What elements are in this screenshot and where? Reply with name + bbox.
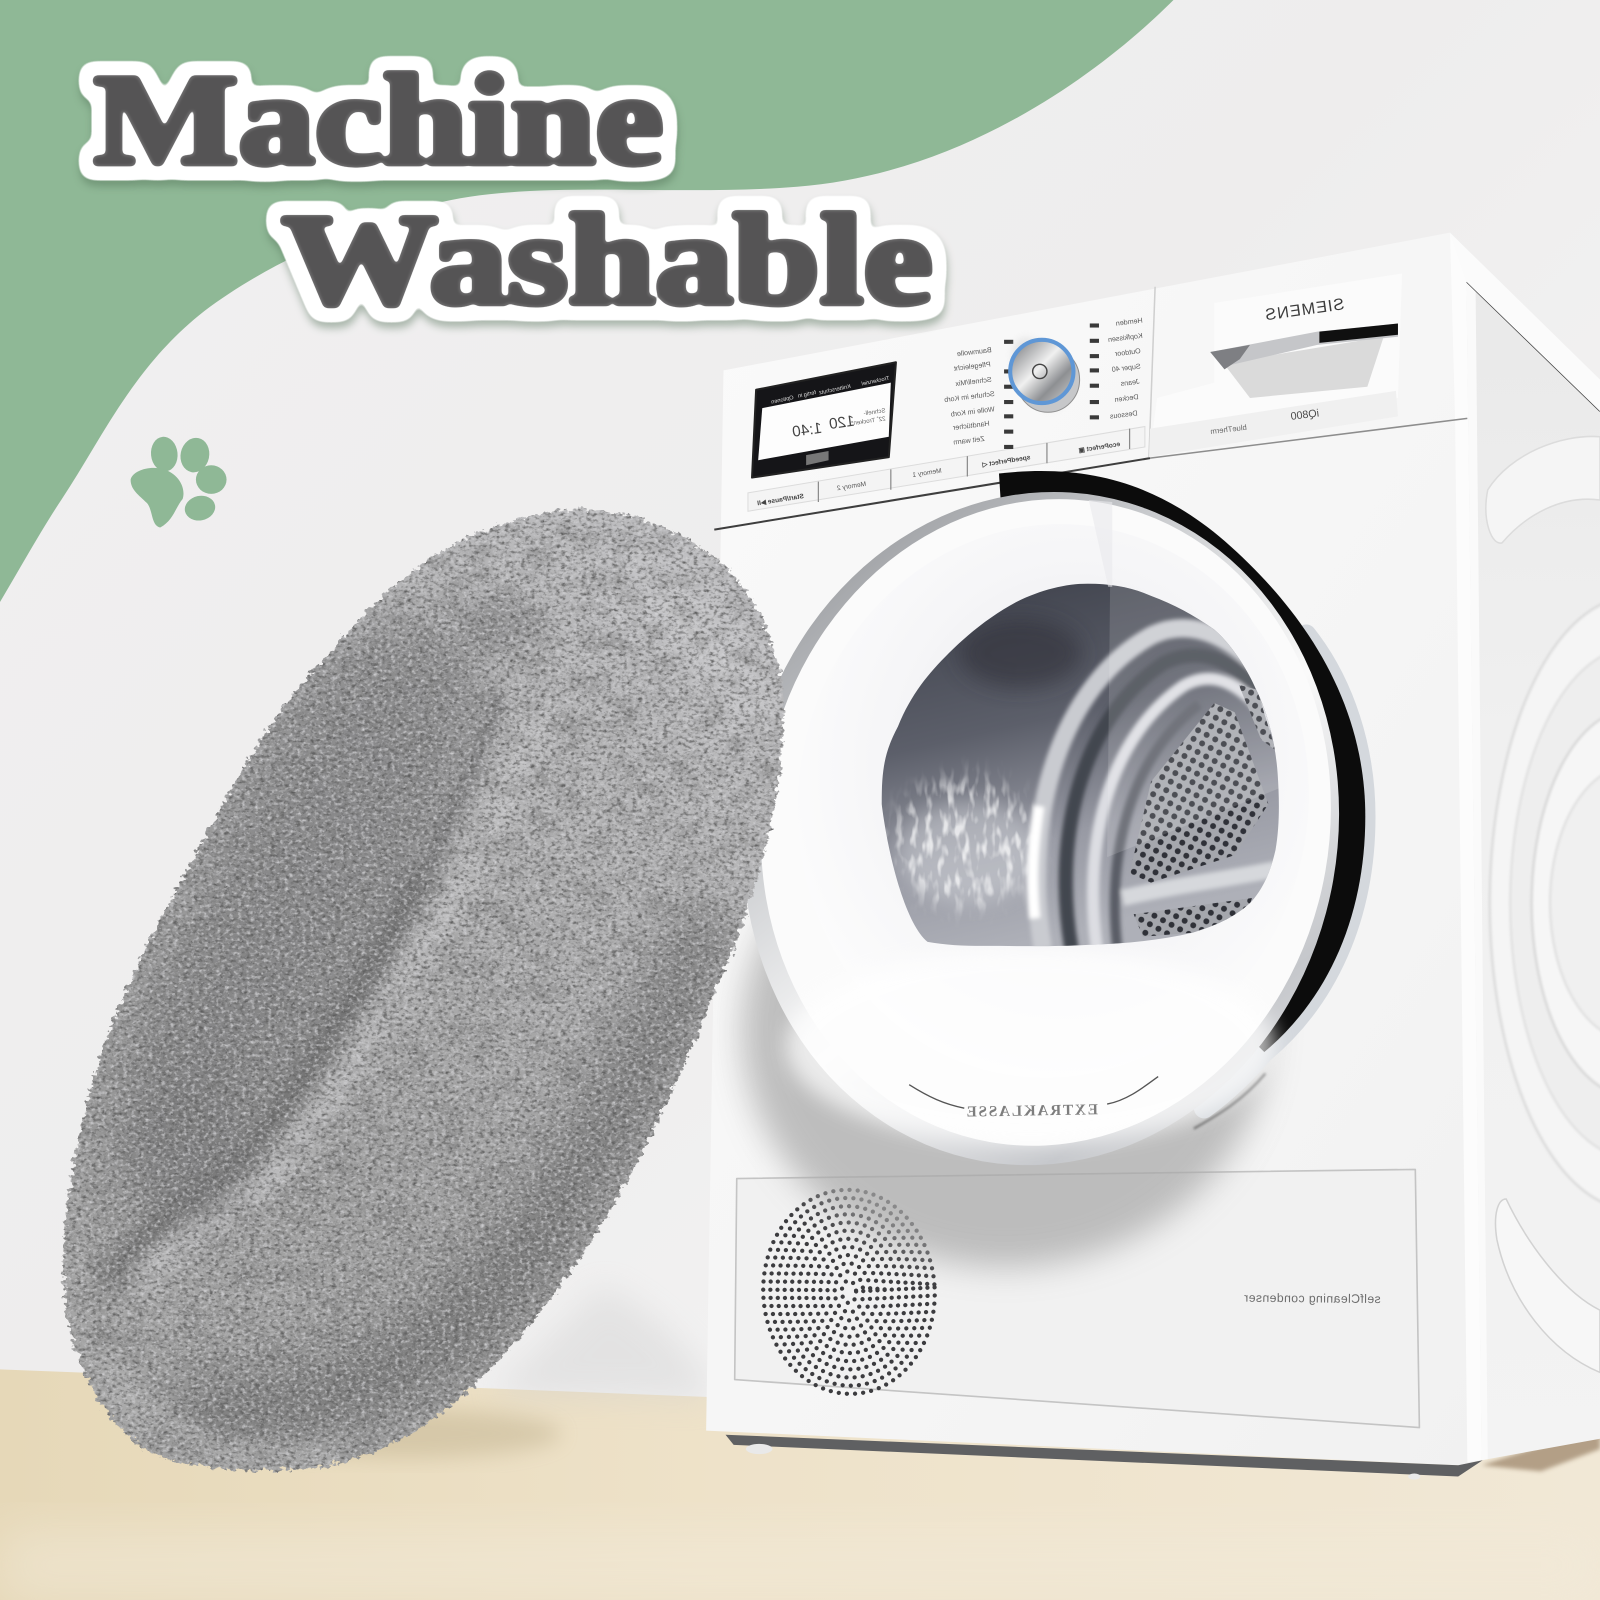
control panel buttons: Memory 1 bbox=[912, 468, 942, 479]
door hinge rim bbox=[1194, 635, 1365, 1129]
icon: paw print bbox=[131, 435, 227, 528]
clothes dryer bbox=[690, 233, 1600, 1480]
program indicator marks bbox=[1004, 323, 1099, 449]
dryer side panel with embossed rings bbox=[1459, 276, 1600, 1469]
display screen: fertig in bbox=[797, 390, 817, 400]
control panel buttons: Memory 2 bbox=[836, 481, 867, 492]
program labels, left column bbox=[944, 346, 995, 447]
program labels, right column: Decken bbox=[1114, 393, 1139, 404]
control panel buttons: speedPerfect ◁ bbox=[981, 454, 1031, 469]
program labels, right column: Super 40 bbox=[1111, 362, 1141, 374]
glass reflection bbox=[1107, 577, 1286, 857]
glass reflection edge on door bbox=[1089, 500, 1112, 587]
program labels, left column: Schuhe im Korb bbox=[944, 390, 995, 404]
right corner chamfer bbox=[1450, 233, 1482, 1462]
program labels, right column bbox=[1107, 316, 1143, 421]
fluffy grey donut pet bed bbox=[63, 509, 784, 1471]
display screen: Schnell- bbox=[863, 407, 886, 417]
control panel buttons bbox=[748, 427, 1145, 511]
program labels, left column: Schnell/Mix bbox=[955, 376, 992, 388]
dryer top surface bbox=[1450, 233, 1600, 411]
door logo: EXTRAKLASSE bbox=[965, 1101, 1098, 1121]
base strip and feet bbox=[726, 1435, 1483, 1480]
black door seal bbox=[999, 471, 1365, 1052]
green curved background shape bbox=[0, 0, 1173, 602]
control panel buttons: Start/Pause ▶II bbox=[757, 493, 804, 507]
program dial bbox=[1002, 329, 1080, 417]
drum rings bbox=[1033, 628, 1276, 949]
program labels, left column: Handtücher bbox=[952, 420, 990, 432]
drum perforated back bbox=[1130, 703, 1268, 883]
title line 2: Washable bbox=[282, 189, 933, 332]
display screen: Knitterschutz bbox=[818, 384, 851, 396]
control panel buttons: ecoPerfect ▣ bbox=[1077, 441, 1121, 455]
door cast shadow bbox=[725, 924, 1282, 1283]
panel dividing lines bbox=[714, 287, 1467, 530]
lower vent panel bbox=[735, 1169, 1419, 1428]
drum window bbox=[878, 577, 1286, 954]
program labels, left column: Pflegeleicht bbox=[954, 360, 991, 373]
program labels, right column: Kopfkissen bbox=[1107, 332, 1143, 344]
program labels, left column: Baumwolle bbox=[956, 346, 992, 358]
display screen: Optionen bbox=[771, 395, 794, 406]
title: Machine Washable bbox=[94, 49, 933, 332]
wooden floor bbox=[0, 1369, 1600, 1600]
dryer front panel bbox=[706, 233, 1482, 1465]
display screen: 22˚ Trocken* bbox=[850, 415, 886, 427]
display screen: 120 bbox=[828, 413, 856, 433]
brand name: SIEMENS bbox=[1263, 295, 1345, 324]
condenser label: selfCleaning condenser bbox=[1244, 1291, 1381, 1306]
program labels, left column: Wolle im Korb bbox=[950, 405, 995, 419]
detergent drawer: blueTherm bbox=[1210, 423, 1247, 436]
program labels, right column: Jeans bbox=[1120, 378, 1140, 388]
bed shading and folds bbox=[102, 571, 745, 1460]
program labels, right column: Outdoor bbox=[1114, 347, 1141, 358]
speaker grille bbox=[758, 1185, 940, 1398]
program labels, right column: Hemden bbox=[1115, 316, 1143, 328]
display screen bbox=[752, 362, 896, 478]
detergent drawer bbox=[1149, 273, 1402, 457]
drum bright reflections bbox=[898, 801, 1041, 903]
model labels: iQ800 bbox=[1290, 407, 1320, 423]
title line 1: Machine bbox=[94, 49, 663, 192]
bed shadow on wall and floor bbox=[255, 1286, 1600, 1471]
display screen: Trockenziel bbox=[861, 376, 890, 387]
program labels, right column: Dessous bbox=[1109, 409, 1138, 421]
door logo bbox=[909, 1077, 1158, 1121]
program labels, left column: Zeit warm bbox=[953, 435, 985, 447]
display screen: 1:40 bbox=[791, 420, 823, 441]
door disc bbox=[690, 444, 1392, 1213]
